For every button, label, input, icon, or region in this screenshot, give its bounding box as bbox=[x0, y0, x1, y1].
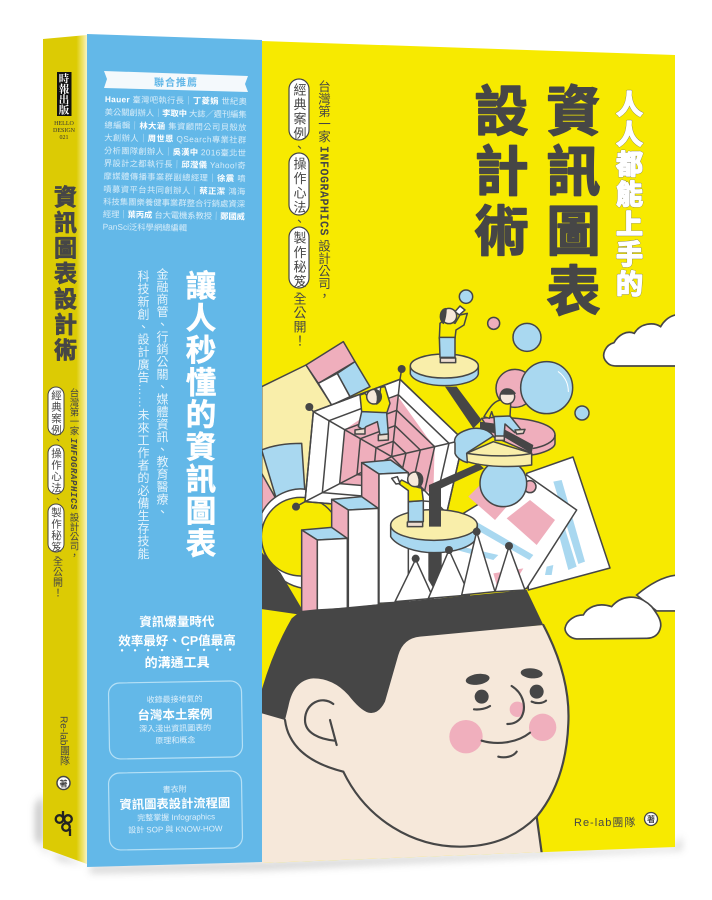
book spine bbox=[43, 35, 87, 864]
person blowing bubble bbox=[439, 306, 467, 363]
series label: HELLO bbox=[54, 121, 74, 127]
recommenders list: 大創辦人｜周世恩 QSearch專業社群 bbox=[104, 132, 246, 145]
title tagline: 人人都能上手的 bbox=[612, 90, 642, 300]
back paper bbox=[527, 457, 610, 590]
nose, mouth and lines bbox=[474, 686, 546, 757]
title bbox=[466, 83, 599, 323]
spine author bbox=[57, 716, 70, 790]
author: 著 bbox=[647, 814, 655, 824]
obi description: 金融商管、行銷公關、媒體資訊、教育醫療、 bbox=[155, 267, 169, 518]
top platform bbox=[410, 354, 478, 386]
recommenders list: 界設計之都執行長｜邱瀅儀 Yahoo!奇 bbox=[104, 158, 246, 170]
pill labels bbox=[289, 79, 309, 348]
main obi headline: 讓人秒懂的資訊圖表 bbox=[181, 269, 216, 560]
recommenders list: Hauer 臺灣吧執行長｜丁菱娟 世紀奧 bbox=[105, 94, 247, 106]
cheeks and nose blush bbox=[449, 702, 556, 753]
recommenders list: PanSci泛科學網總編輯 bbox=[103, 221, 187, 233]
yellow circle with ring bbox=[262, 488, 331, 614]
book shadow bbox=[36, 795, 682, 873]
person pointing at bars bbox=[392, 472, 423, 527]
face skin bbox=[262, 625, 569, 867]
feature box: local cases: 台灣本土案例 bbox=[137, 706, 213, 723]
recommenders list bbox=[103, 94, 248, 234]
recommenders list: 嘖募資平台共同創辦人｜蔡正潔 鴻海 bbox=[103, 184, 245, 196]
spine pills: 全公開！ bbox=[50, 556, 62, 598]
spine pills: 、 bbox=[50, 494, 62, 504]
bar chart bbox=[302, 460, 408, 612]
obi description bbox=[136, 267, 169, 560]
spine pills: 製作秘笈 bbox=[50, 506, 62, 553]
pill labels: 經典案例 bbox=[292, 83, 306, 141]
feature box: flow chart: 資訊圖表設計流程圖 bbox=[119, 795, 230, 812]
spine publisher mark bbox=[56, 811, 72, 836]
author bbox=[574, 812, 658, 829]
clouds bbox=[565, 313, 680, 639]
person climbing web bbox=[355, 387, 390, 441]
feature box: local cases: 收錄最接地氣的 bbox=[147, 694, 203, 704]
title: 設計術 bbox=[466, 83, 528, 263]
obi description: 科技新創、設計廣告……未來工作者的必備生存技能 bbox=[136, 270, 150, 560]
feature box: flow chart: 完整掌握 Infographics bbox=[137, 811, 215, 823]
feature box: local cases bbox=[108, 681, 243, 759]
pill labels: 、 bbox=[292, 141, 306, 153]
eyes and brows bbox=[465, 667, 544, 704]
feature box: local cases: 深入淺出資訊圖表的 bbox=[139, 722, 211, 734]
feature box: flow chart bbox=[108, 771, 243, 850]
illustration bbox=[261, 290, 610, 613]
series label: 021 bbox=[60, 135, 68, 141]
spine title: 資訊圖表設計術 bbox=[50, 185, 77, 364]
recommendation banner bbox=[104, 71, 248, 92]
spine pills: 、 bbox=[50, 435, 62, 445]
value proposition: 的溝通工具 bbox=[145, 655, 210, 670]
pie chart platform bbox=[455, 417, 555, 466]
spine pills: 操作心法 bbox=[50, 447, 62, 494]
pill labels: 操作心法 bbox=[292, 156, 306, 215]
feature box: flow chart: 書衣附 bbox=[163, 784, 187, 794]
front paper with chart blocks bbox=[457, 475, 577, 591]
recommenders list: 總編輯｜林大涵 集資顧問公司貝殼放 bbox=[104, 120, 247, 132]
feature box: flow chart: 設計 SOP 與 KNOW-HOW bbox=[128, 823, 223, 835]
head illustration bbox=[262, 590, 569, 867]
triangle peaks with dots bbox=[395, 528, 525, 602]
spine subtitle: 台灣第一家 INFOGRAPHICS 設計公司， bbox=[68, 387, 79, 560]
pill labels: 、 bbox=[292, 215, 306, 227]
back cover yellow background and illustration bbox=[261, 40, 680, 867]
spine pills: 經典案例 bbox=[50, 389, 62, 436]
recommenders list: 摩媒體傳播事業群副總經理｜徐震 噴 bbox=[103, 171, 246, 183]
bubbles bbox=[459, 290, 589, 507]
lower stem bbox=[428, 552, 442, 588]
pill labels: 製作秘笈 bbox=[292, 231, 306, 289]
spine pills bbox=[48, 387, 64, 598]
recommenders list: 科技集團樂養健事業群整合行銷處資深 bbox=[103, 196, 246, 209]
subtitle: 台灣第一家 INFOGRAPHICS 設計公司， bbox=[316, 79, 330, 302]
value proposition bbox=[118, 614, 236, 670]
series label bbox=[53, 121, 76, 141]
pill labels: 全公開！ bbox=[292, 292, 306, 348]
lower platform bbox=[391, 463, 484, 553]
title: 資訊圖表 bbox=[538, 83, 599, 323]
dark stems bbox=[445, 387, 482, 428]
value proposition: 效率最好、CP值最高 bbox=[118, 633, 236, 648]
feature box: local cases: 原理和概念 bbox=[155, 735, 195, 745]
ear bbox=[305, 700, 337, 745]
hair bbox=[262, 590, 543, 720]
series label: DESIGN bbox=[53, 128, 76, 134]
colour block background bbox=[262, 342, 370, 513]
blue obi panel bbox=[87, 34, 262, 867]
recommenders list: 經理｜葉丙成 台大電機系教授｜鄭國威 bbox=[103, 209, 246, 221]
title tagline: 人人都能上手的 bbox=[612, 90, 642, 300]
recommendation banner: 聯合推薦 bbox=[154, 76, 198, 89]
recommenders list: 分析團隊創辦人｜吳漢中 2016臺北世 bbox=[104, 145, 246, 158]
head outline bbox=[285, 625, 569, 853]
value proposition: 資訊爆量時代 bbox=[139, 614, 215, 629]
spider web chart bbox=[292, 365, 463, 513]
spine author: Re-lab團隊 bbox=[58, 716, 70, 766]
person on pie chart bbox=[484, 389, 525, 440]
recommenders list: 美公關創辦人｜李取中 大誌／週刊編集 bbox=[105, 107, 247, 119]
spine author: 著 bbox=[60, 778, 68, 788]
publisher logo: 時報出版 bbox=[56, 72, 72, 116]
white ground behind peaks bbox=[409, 543, 474, 602]
author: Re-lab團隊 bbox=[574, 815, 636, 829]
